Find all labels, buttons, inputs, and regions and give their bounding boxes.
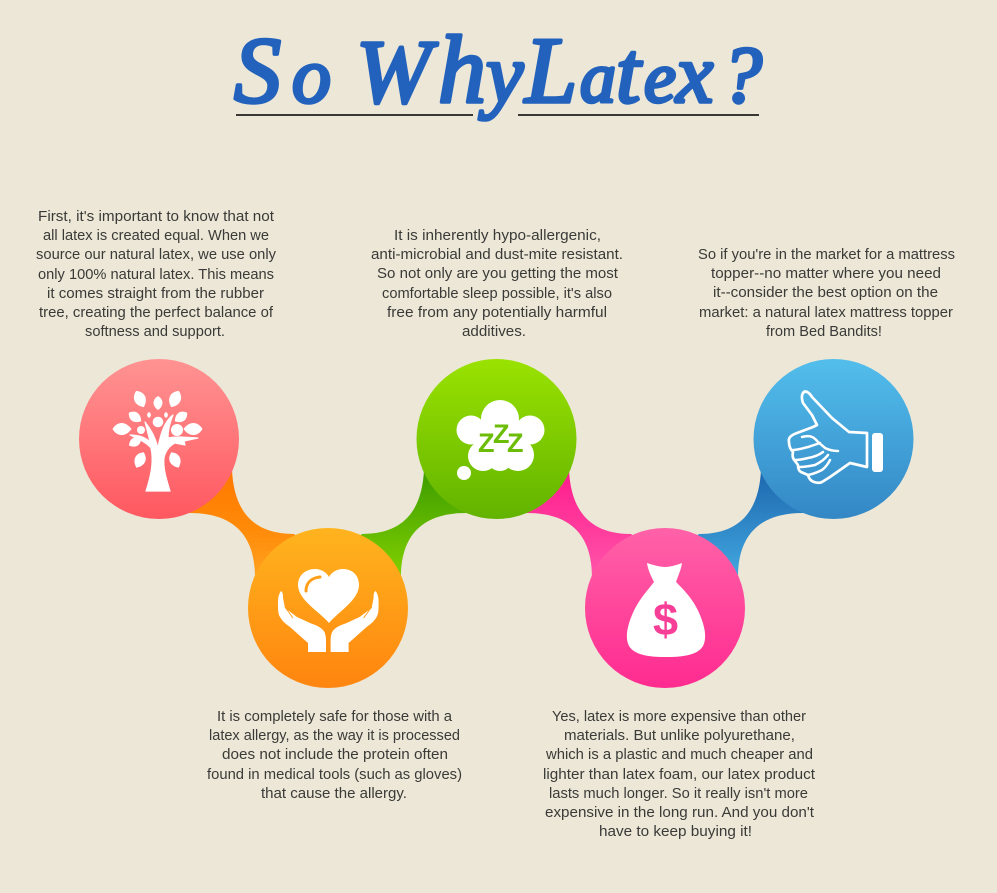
text block: conclusion (698, 246, 955, 340)
text block: allergy safe (207, 708, 462, 802)
text block: allergy safe: does not include the protein often (222, 746, 448, 763)
title: t (616, 25, 643, 122)
title: y (478, 28, 524, 121)
title (234, 16, 762, 123)
text block: cost (543, 708, 816, 840)
text block: cost: materials. But unlike polyurethane, (564, 727, 795, 744)
text block: allergy safe: found in medical tools (such as gloves) (207, 766, 462, 783)
text block: conclusion: market: a natural latex mattress topper (699, 304, 953, 321)
circle: blue (754, 359, 914, 519)
text block: cost: Yes, latex is more expensive than other (552, 708, 806, 725)
icon: thumbs up (789, 392, 883, 483)
title: e (644, 38, 676, 118)
icon: sleep thought cloud: Z (478, 428, 494, 458)
text block: natural latex: all latex is created equal. When we (43, 227, 269, 244)
icon: heart in hands (278, 569, 379, 652)
text block: natural latex: source our natural latex, we use only (36, 246, 276, 263)
connector: green to pink (487, 470, 677, 577)
connector: red to orange (150, 470, 340, 577)
text block: natural latex: tree, creating the perfect balance of (39, 304, 274, 321)
text block: hypo-allergenic: So not only are you getting the most (377, 265, 619, 282)
text block: natural latex (36, 208, 276, 340)
text block: conclusion: topper--no matter where you need (711, 265, 941, 282)
text block: cost: expensive in the long run. And you don't (545, 804, 815, 821)
title: x (674, 28, 713, 121)
text block: hypo-allergenic: additives. (462, 323, 526, 340)
text block: hypo-allergenic: It is inherently hypo-allergenic, (394, 227, 601, 244)
text block: cost: lasts much longer. So it really isn't more (549, 785, 808, 802)
text block: natural latex: First, it's important to know that not (38, 208, 275, 225)
text block: natural latex: softness and support. (85, 323, 225, 340)
text block: cost: which is a plastic and much cheaper and (545, 746, 813, 763)
text block: allergy safe: It is completely safe for those with a (217, 708, 453, 725)
text block: hypo-allergenic (371, 227, 623, 340)
text block: hypo-allergenic: comfortable sleep possible, it's also (382, 285, 612, 302)
circle: red (79, 359, 239, 519)
connector: orange to green (316, 470, 506, 577)
title: W (356, 23, 438, 122)
circle: green (416, 359, 576, 519)
icon: sleep thought cloud: Z (493, 419, 510, 449)
icon: tree (112, 388, 202, 491)
text block: conclusion: from Bed Bandits! (766, 323, 882, 340)
text block: natural latex: only 100% natural latex. This means (38, 266, 274, 283)
title: ? (722, 32, 762, 120)
text block: conclusion: So if you're in the market for a mattress (698, 246, 955, 263)
icon: sleep thought cloud (456, 400, 544, 480)
title: L (523, 19, 577, 123)
title: o (292, 32, 331, 119)
title: S (234, 19, 281, 123)
icon: money bag (627, 563, 705, 657)
connector: pink to blue (653, 470, 843, 577)
text block: hypo-allergenic: free from any potentially harmful (387, 304, 607, 321)
title: a (580, 38, 616, 118)
icon: money bag: $ (653, 594, 678, 645)
title: h (438, 16, 486, 123)
text block: allergy safe: latex allergy, as the way it is processed (209, 727, 460, 744)
text block: natural latex: it comes straight from the rubber (47, 285, 264, 302)
text block: hypo-allergenic: anti-microbial and dust-mite resistant. (371, 246, 623, 263)
circle: pink (585, 528, 745, 688)
icon: sleep thought cloud: Z (507, 428, 524, 458)
text block: cost: lighter than latex foam, our latex product (543, 766, 816, 783)
text block: conclusion: it--consider the best option on the (713, 284, 938, 301)
circle: orange (248, 528, 408, 688)
text block: cost: have to keep buying it! (599, 823, 752, 840)
text block: allergy safe: that cause the allergy. (261, 785, 407, 802)
